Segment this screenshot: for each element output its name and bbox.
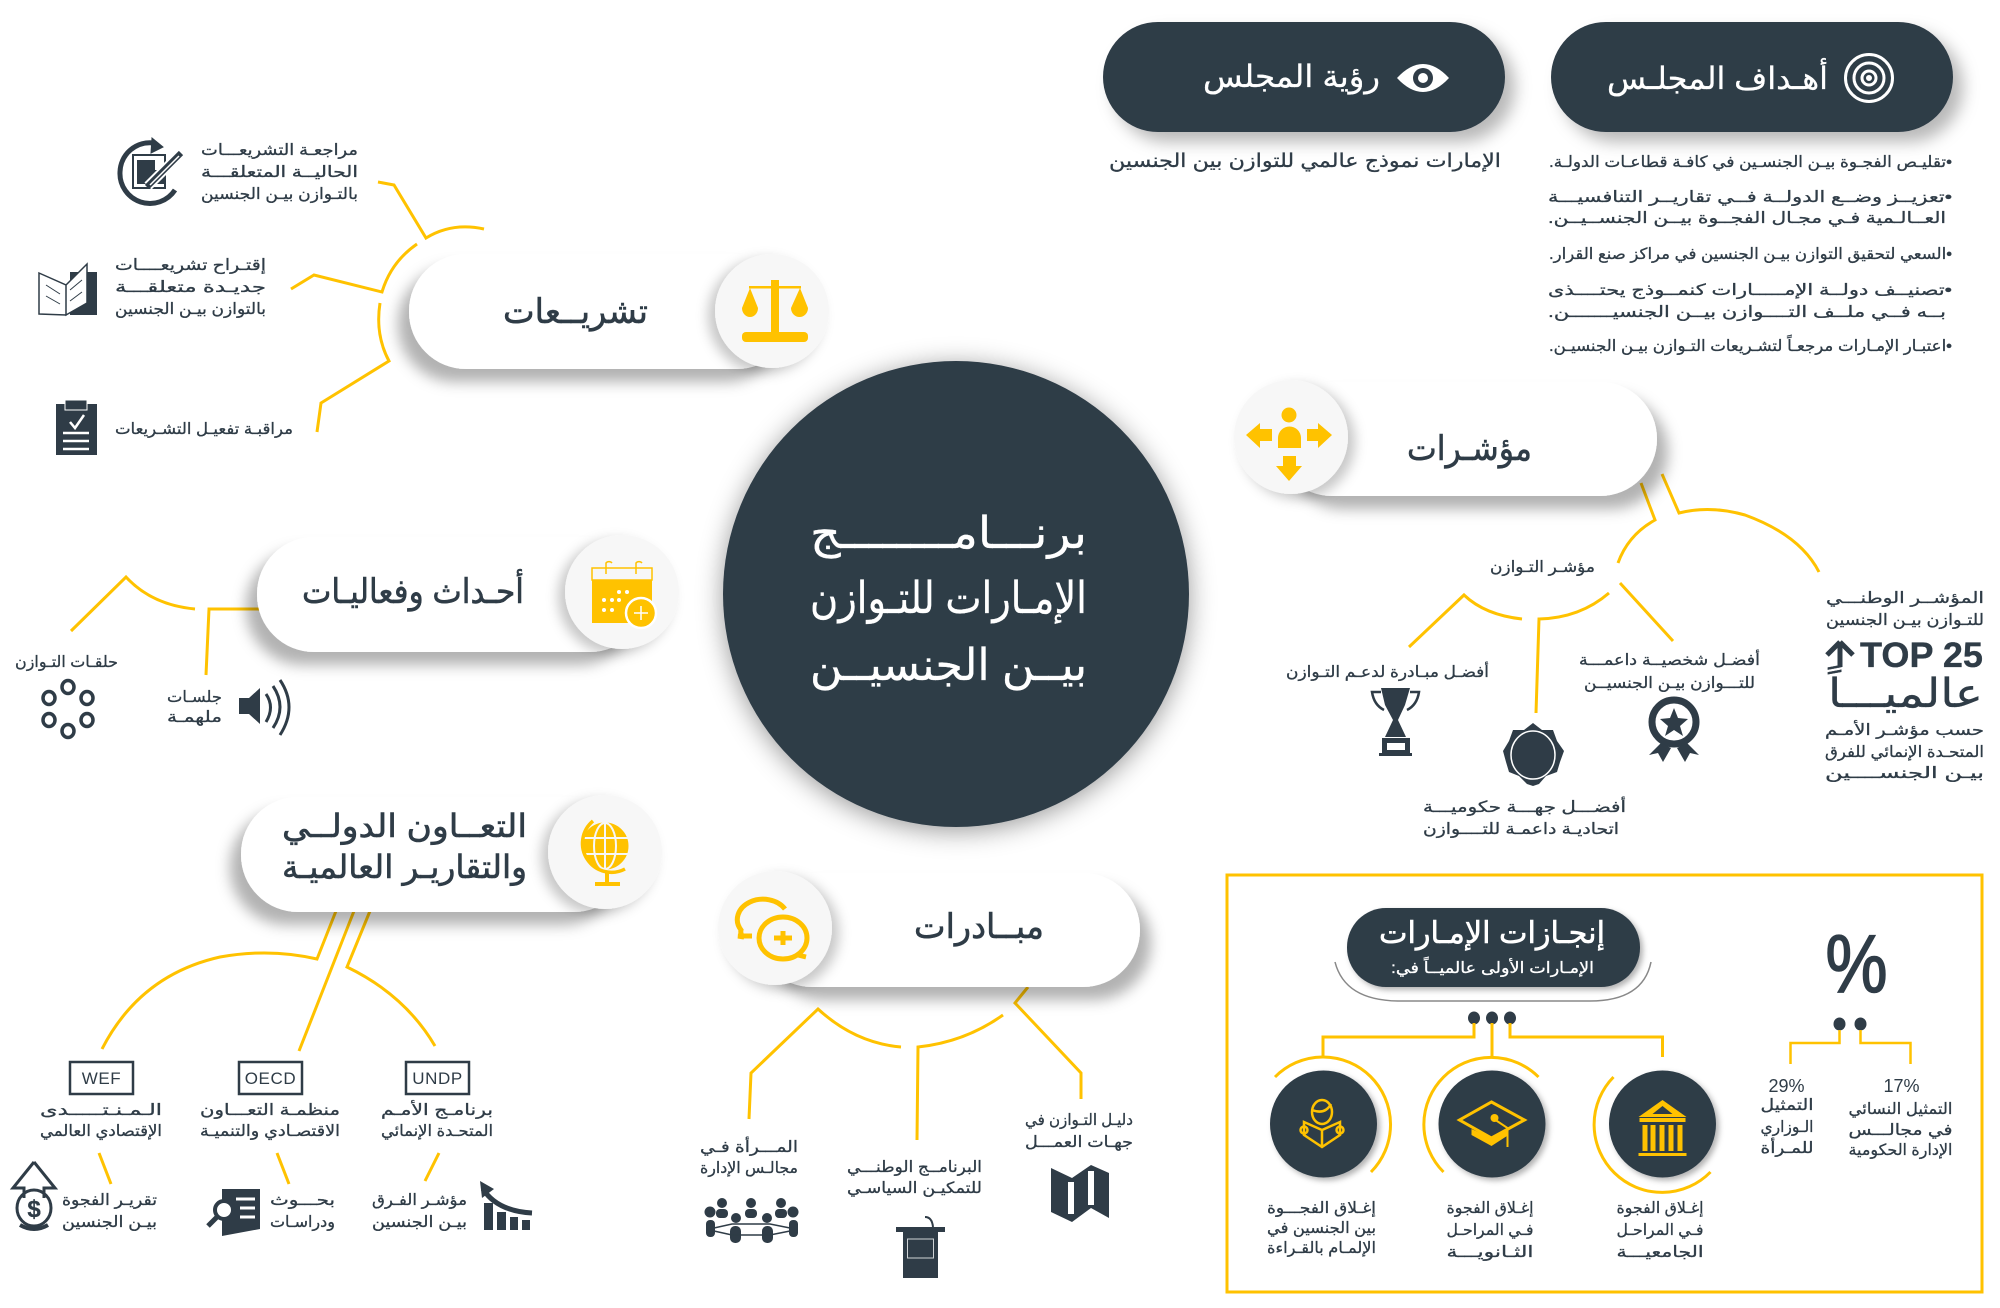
item: best personality bbox=[1579, 649, 1760, 762]
icon: person with arrows bbox=[1246, 408, 1332, 481]
item: reading gap: الإلمـام بالقـراءة bbox=[1267, 1240, 1376, 1257]
item: national index top 25: المؤشــر الوطنـــي bbox=[1826, 590, 1984, 608]
OECD column: الاقتصـادي والتنميـة bbox=[200, 1123, 340, 1141]
connector lines: events bbox=[71, 577, 262, 675]
connector lines: initiatives bbox=[749, 987, 1081, 1140]
OECD column: منظمـة التعـــاون bbox=[200, 1102, 340, 1120]
stat: women in cabinet 29%: 29% bbox=[1768, 1076, 1805, 1096]
text: inspiring sessions bbox=[167, 689, 222, 727]
item: best government entity bbox=[1423, 723, 1626, 838]
panel: legislation bbox=[39, 138, 829, 455]
WEF column: تقريـر الفجوة bbox=[62, 1192, 157, 1209]
icon: boardroom people bbox=[704, 1198, 798, 1243]
stat: women in cabinet 29%: للمـرأة bbox=[1760, 1137, 1814, 1157]
item: women on boards: المـــرأة فـي bbox=[700, 1136, 798, 1157]
heading pill: achievements: الإمـارات الأولى عالميــاً في: bbox=[1391, 957, 1594, 978]
item: political empowerment: البرنامــج الوطنـــي bbox=[847, 1159, 982, 1177]
central circle: programme title: برنـــامــــــــج bbox=[810, 509, 1087, 559]
UNDP column: بيـن الجنسين bbox=[372, 1214, 467, 1231]
central circle: programme title bbox=[723, 361, 1189, 827]
icon: reader bbox=[1300, 1100, 1344, 1147]
panel: UAE achievements bbox=[1227, 875, 1982, 1292]
item: women on boards: مجالـس الإدارة bbox=[700, 1160, 798, 1177]
central circle: programme title: بيــن الجنسيــن bbox=[810, 641, 1087, 691]
item: best government entity: أفضـــل جهـــة حكوميـــة bbox=[1423, 796, 1626, 817]
icon: chat bubbles bbox=[737, 899, 807, 959]
item: best personality: للتـــوازن بيـن الجنسيــن bbox=[1584, 675, 1755, 692]
item: university education gap: فـي المراحـل bbox=[1616, 1222, 1704, 1240]
panel: council vision: رؤية المجلس bbox=[1203, 59, 1380, 95]
icon: scales bbox=[742, 280, 808, 342]
label box: UNDP bbox=[406, 1062, 469, 1094]
text: review legislation bbox=[201, 142, 358, 203]
panel: council goals: أهـداف المجلـس bbox=[1607, 58, 1828, 96]
label box: WEF: WEF bbox=[82, 1069, 121, 1088]
text: monitor legislation: مراقبـة تفعيـل التشـريعات bbox=[115, 421, 293, 438]
item: national index top 25: حسب مؤشـر الأمـم bbox=[1825, 720, 1984, 739]
goals list: بــه فــي ملــف التــــوازن بيــن الجنسيـــــــن. bbox=[1548, 304, 1946, 322]
icon: podium bbox=[896, 1217, 945, 1278]
icon: up arrow bbox=[1827, 642, 1853, 667]
icon: falling chart bbox=[480, 1181, 532, 1230]
panel: events bbox=[15, 535, 679, 738]
pill: events heading bbox=[257, 535, 679, 652]
percent statistics: % bbox=[1826, 919, 1888, 1010]
text: review legislation: بالتـوازن بيـن الجنسين bbox=[201, 186, 358, 203]
goals list: •تصنيــف دولــة الإمـــــارات كنمــوذج يحتــــذى bbox=[1548, 282, 1952, 300]
label box: OECD: OECD bbox=[245, 1069, 296, 1088]
item: political empowerment bbox=[847, 1159, 982, 1278]
stat: women in cabinet 29% bbox=[1760, 1076, 1814, 1157]
panel: indicators bbox=[1234, 380, 1984, 838]
label box: UNDP: UNDP bbox=[412, 1069, 463, 1088]
panel: council vision: الإمارات نموذج عالمي للتوازن بين الجنسين bbox=[1109, 151, 1501, 172]
icon: open book bbox=[39, 264, 97, 315]
OECD column: ودراسـات bbox=[270, 1214, 335, 1232]
stat: women on boards 17%: الإدارة الحكومية bbox=[1848, 1142, 1952, 1159]
icon: dollar arrow bbox=[13, 1162, 55, 1229]
pill: cooperation heading: التعــاون الدولــي bbox=[282, 808, 527, 845]
item: balance guide bbox=[1025, 1112, 1133, 1222]
text: propose legislation: جديـدة متعلقـــة bbox=[115, 279, 266, 296]
stat: women in cabinet 29%: الـوزاري bbox=[1760, 1119, 1814, 1137]
item: secondary education gap bbox=[1424, 1057, 1546, 1261]
UNDP column: مؤشـر الفـرق bbox=[372, 1192, 467, 1209]
heading pill: achievements bbox=[1335, 908, 1651, 1001]
goals list: •تقليـص الفجـوة بيـن الجنسـين في كافـة قطاعـات الدولـة. bbox=[1549, 154, 1952, 172]
pill: initiatives heading bbox=[718, 871, 1140, 987]
item: university education gap: إغـلاق الفجوة bbox=[1616, 1200, 1704, 1217]
item: national index top 25: عالميـــاً bbox=[1827, 664, 1983, 716]
icon: trophy bbox=[1372, 688, 1419, 756]
percent statistics bbox=[1760, 919, 1952, 1159]
goals list: •السعي لتحقيق التوازن بيـن الجنسين في مراكز صنع القرار. bbox=[1549, 246, 1952, 264]
icon: circle of rings bbox=[43, 680, 93, 738]
text: inspiring sessions: جلسـات bbox=[167, 689, 222, 706]
item: political empowerment: للتمكيـن السياسـي bbox=[847, 1180, 982, 1198]
item: national index top 25 bbox=[1825, 590, 1984, 782]
central circle: programme title: الإمـارات للتـوازن bbox=[810, 574, 1087, 624]
text: balance circles: حلقـات التـوازن bbox=[15, 654, 118, 671]
stat: women on boards 17%: التمثيل النسائي bbox=[1848, 1101, 1952, 1119]
pill: cooperation heading bbox=[241, 795, 662, 912]
item: national index top 25: TOP 25 bbox=[1860, 636, 1983, 675]
label box: OECD bbox=[239, 1062, 302, 1094]
pill: indicators heading: مؤشـرات bbox=[1407, 430, 1532, 469]
panel: initiatives bbox=[700, 871, 1140, 1278]
panel: council goals bbox=[1548, 22, 1953, 355]
WEF column: بيـن الجنسين bbox=[62, 1214, 157, 1231]
UNDP column: برنامـج الأمـم bbox=[381, 1100, 493, 1119]
goals list: •تعزيــز وضــع الدولــة فــي تقاريــر التنافسيـــة bbox=[1548, 189, 1952, 207]
item: balance guide: جهـات العمـــل bbox=[1025, 1134, 1133, 1152]
icon: seal badge bbox=[1503, 723, 1564, 786]
item: balance guide: دليـل التـوازن في bbox=[1025, 1112, 1133, 1130]
icon: institution building bbox=[1638, 1100, 1686, 1156]
goals list: العــالـمية فـي مجـال الفجــوة بيــن الجنســيــن. bbox=[1548, 210, 1946, 228]
UNDP column bbox=[372, 1062, 532, 1231]
icon: research bbox=[208, 1189, 260, 1236]
pill: initiatives heading: مبــادرات bbox=[914, 908, 1044, 946]
connector lines: indicators bbox=[1409, 474, 1819, 713]
pill: cooperation heading: والتقاريـر العالميـة bbox=[282, 849, 527, 886]
item: reading gap: إغـلاق الفجـــوة bbox=[1267, 1200, 1376, 1217]
pill: indicators heading bbox=[1234, 380, 1657, 496]
stat: women on boards 17%: في مجالـــس bbox=[1848, 1122, 1952, 1140]
icon: globe bbox=[582, 821, 628, 884]
icon: eye bbox=[1397, 64, 1449, 92]
OECD column: بحـــوث bbox=[270, 1192, 335, 1209]
WEF column bbox=[13, 1062, 162, 1231]
icon: graduation cap bbox=[1460, 1102, 1524, 1147]
WEF column: الـمـنـتـــــدى bbox=[40, 1102, 162, 1119]
item: secondary education gap: فـي المراحـل bbox=[1446, 1222, 1534, 1240]
item: university education gap: الجامعيـــة bbox=[1616, 1244, 1704, 1261]
pill: legislation heading bbox=[409, 254, 829, 369]
item: national index top 25: بيـن الجنســــين bbox=[1825, 765, 1984, 782]
stat: women in cabinet 29%: التمثيل bbox=[1760, 1097, 1814, 1114]
item: national index top 25: المتحـدة الإنمائي للفرق bbox=[1825, 744, 1984, 762]
connector lines: cooperation bbox=[99, 911, 439, 1184]
item: best initiative: أفضـل مبـادرة لدعـم التـوازن bbox=[1286, 661, 1489, 681]
OECD column bbox=[200, 1062, 340, 1236]
text: propose legislation: إقتـراح تشريعــــات bbox=[115, 257, 266, 275]
icon: target bbox=[1846, 54, 1892, 102]
icon: review document bbox=[120, 138, 181, 203]
item: reading gap bbox=[1267, 1057, 1391, 1257]
text: review legislation: الحاليــة المتعلقـــة bbox=[201, 164, 358, 181]
panel: international cooperation bbox=[13, 795, 662, 1236]
item: best government entity: اتحاديـة داعمـة للتــــوازن bbox=[1423, 821, 1619, 838]
icon: calendar bbox=[592, 562, 656, 628]
item: best initiative bbox=[1286, 661, 1489, 756]
WEF column: الإقتصادي العالمي bbox=[40, 1123, 162, 1141]
pill: events heading: أحـداث وفعاليـات bbox=[302, 569, 524, 612]
connector lines: legislation bbox=[291, 182, 484, 432]
icon: map bbox=[1051, 1165, 1109, 1222]
text: review legislation: مراجعـة التشريعـــات bbox=[201, 142, 358, 159]
icon: clipboard bbox=[56, 400, 97, 455]
item: secondary education gap: الثـانويـــة bbox=[1446, 1244, 1534, 1261]
icon: dollar arrow: $ bbox=[27, 1196, 41, 1223]
goals list: •اعتبـار الإمـارات مرجعـاً لتشـريعات التـوازن بيـن الجنسيـن. bbox=[1549, 335, 1952, 355]
item: national index top 25: للتـوازن بيـن الجنسين bbox=[1826, 612, 1984, 629]
UNDP column: المتحـدة الإنمائي bbox=[381, 1123, 493, 1141]
pill: legislation heading: تشريــعات bbox=[503, 293, 648, 332]
item: women on boards bbox=[700, 1136, 798, 1243]
text: propose legislation bbox=[115, 257, 266, 318]
text: balance index: مؤشـر التـوازن bbox=[1490, 559, 1595, 576]
item: university education gap bbox=[1594, 1070, 1716, 1261]
item: reading gap: بين الجنسين في bbox=[1267, 1220, 1376, 1238]
item: best personality: أفضـل شخصيــة داعمـــة bbox=[1579, 649, 1760, 669]
text: inspiring sessions: ملهمـة bbox=[167, 709, 222, 727]
panel: council vision bbox=[1103, 22, 1505, 172]
goals list bbox=[1548, 154, 1952, 355]
icon: ribbon medal bbox=[1649, 700, 1699, 762]
connector: dots and lines bbox=[1323, 1012, 1662, 1057]
stat: women on boards 17% bbox=[1848, 1076, 1952, 1159]
label box: WEF bbox=[70, 1062, 133, 1094]
text: propose legislation: بالتوازن بيـن الجنسين bbox=[115, 301, 266, 318]
item: secondary education gap: إغـلاق الفجوة bbox=[1446, 1200, 1534, 1217]
stat: women on boards 17%: 17% bbox=[1883, 1076, 1920, 1096]
heading pill: achievements: إنجـازات الإمـارات bbox=[1379, 917, 1605, 951]
icon: speaker bbox=[239, 680, 289, 735]
